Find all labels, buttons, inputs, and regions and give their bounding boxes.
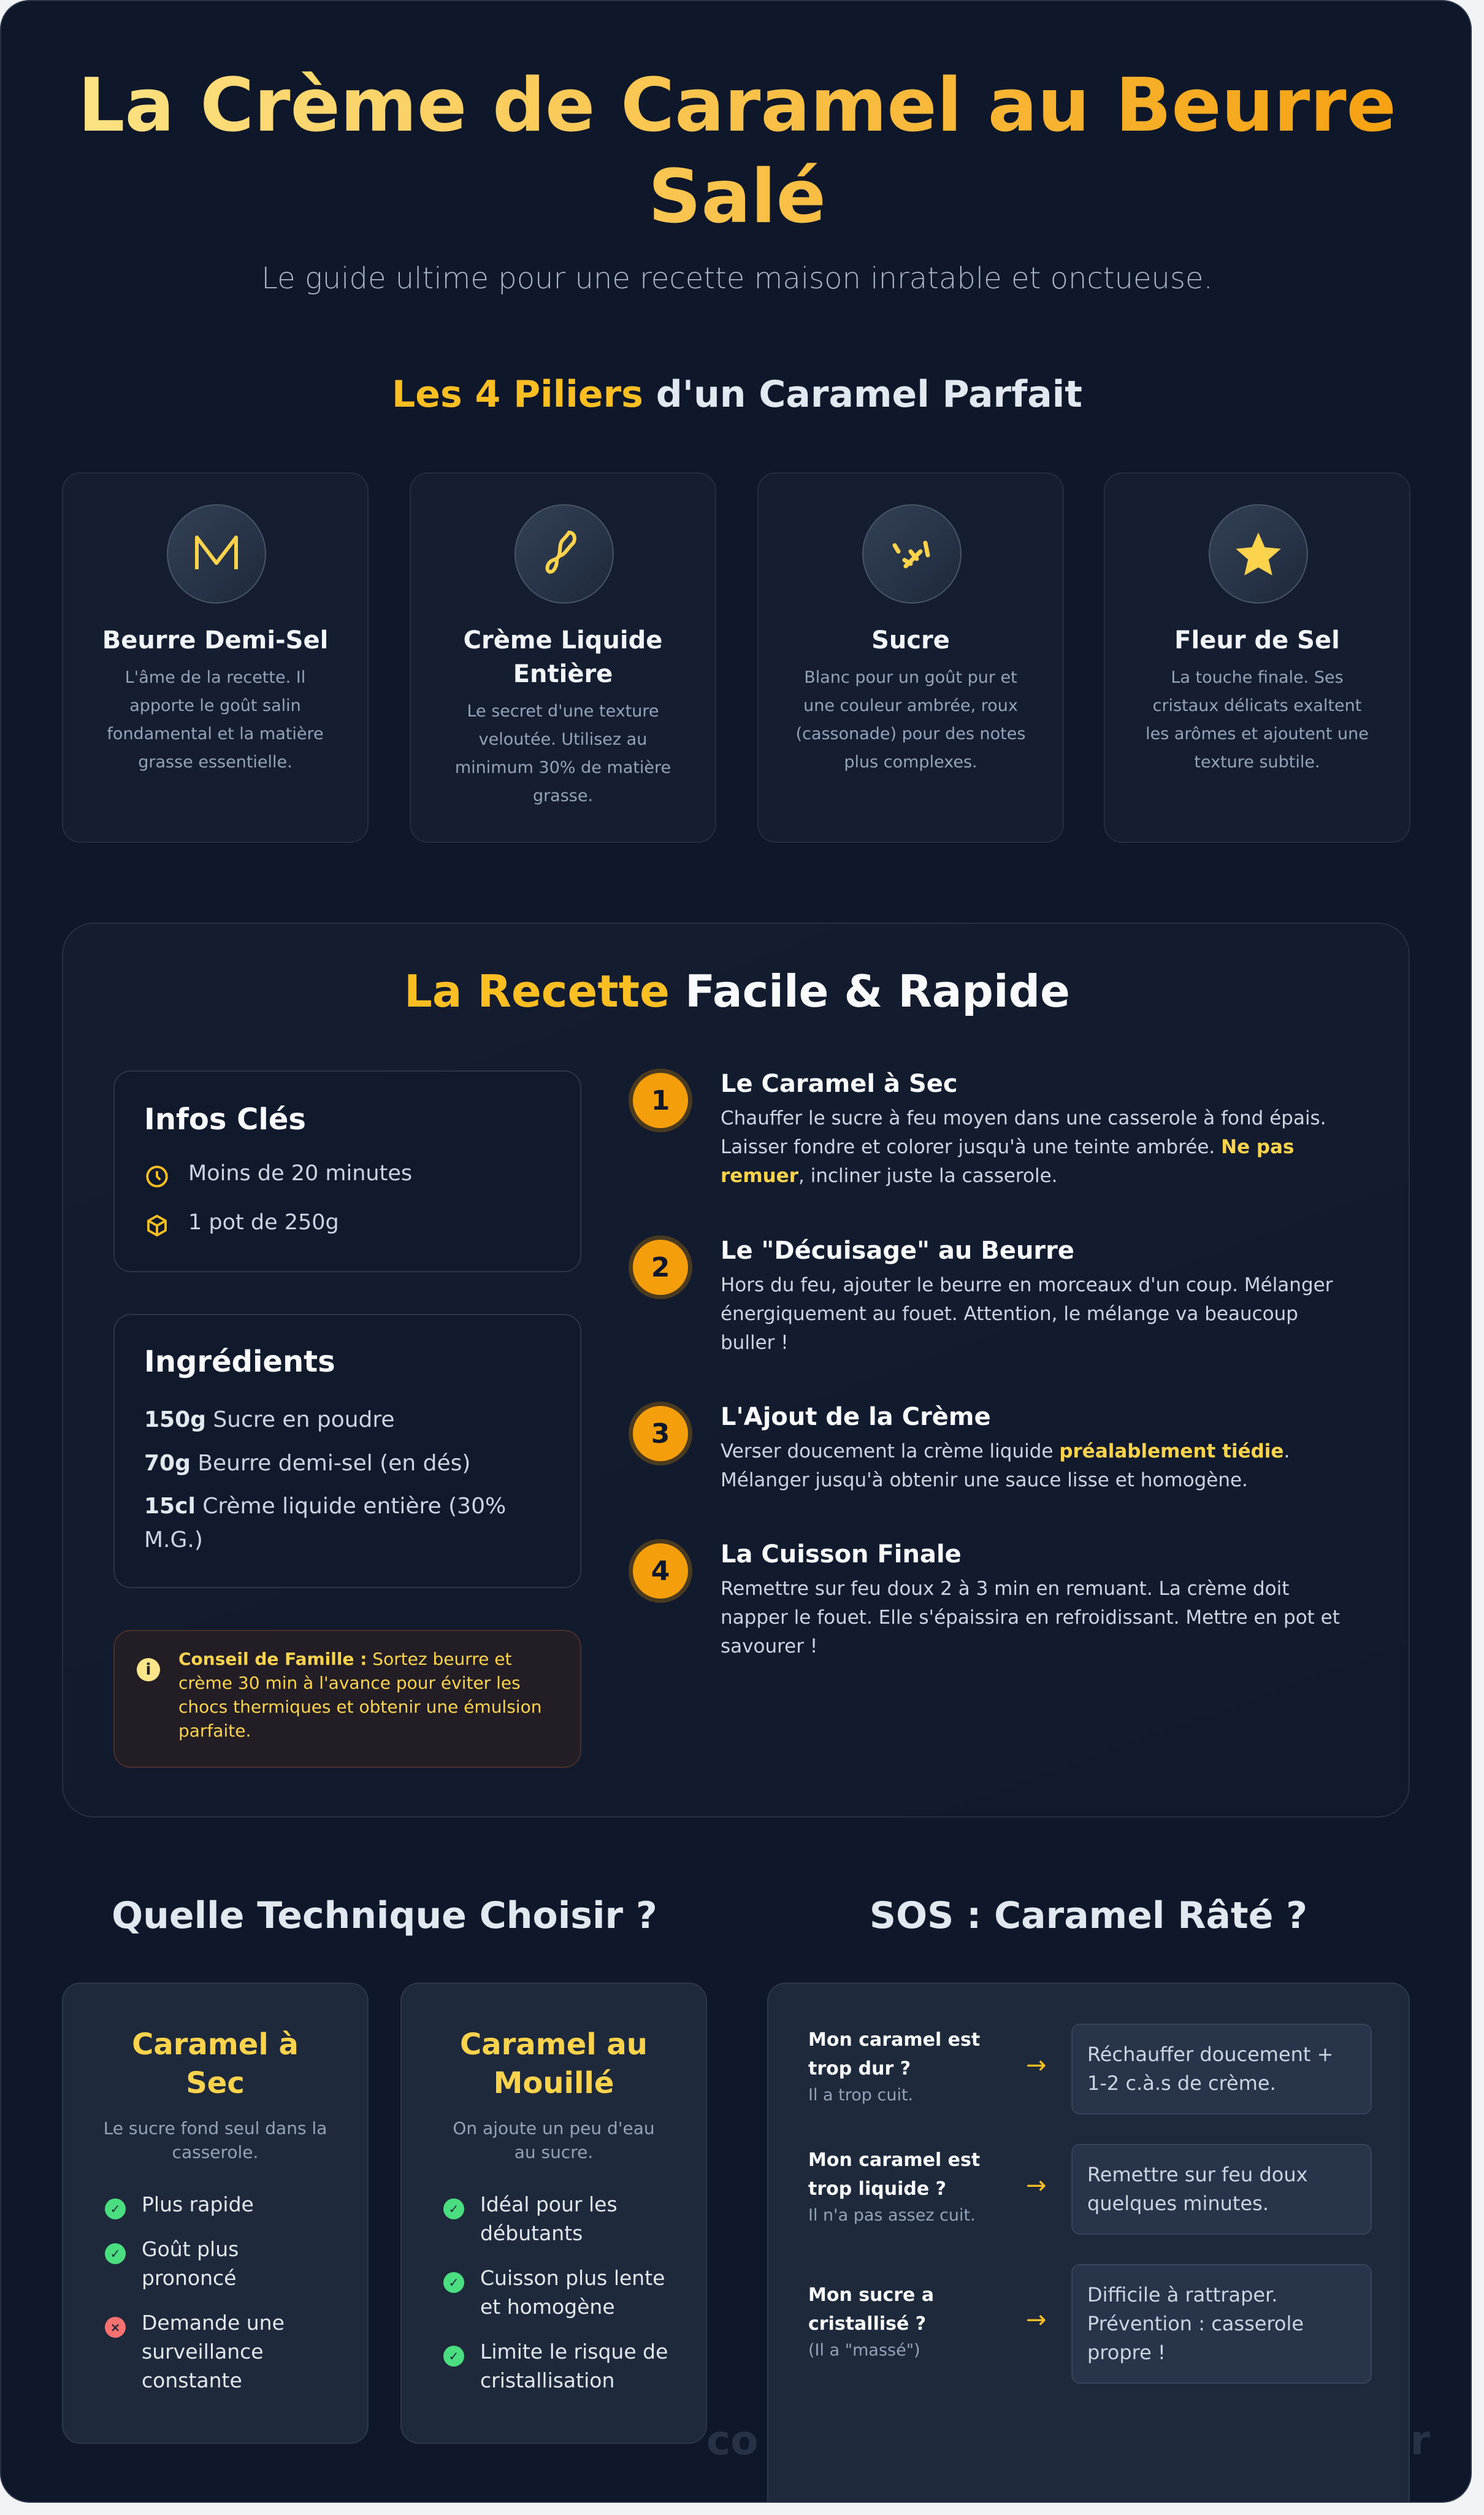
box: ingredients: [113, 1314, 581, 1588]
text: 3: [651, 1418, 670, 1449]
panel: caramel a sec: Demande une surveillance constante: [142, 2311, 285, 2392]
panel: caramel a sec: Caramel à: [132, 2027, 299, 2062]
sos row 3: [808, 2284, 934, 2360]
panel: sos: →: [1026, 2051, 1047, 2079]
title: La Crème de Caramel au Beurre: [78, 63, 1396, 148]
step 1: Chauffer le sucre à feu moyen dans une casserole à fond épais. Laisser fondre et colorer jusqu'à une teinte ambrée. Ne pas remuer, incliner juste la casserole.: [721, 1107, 1326, 1187]
panel: caramel au mouille: ✓: [449, 2275, 459, 2290]
text: 1: [651, 1085, 670, 1116]
panel: fleur de sel: Fleur de Sel: [1174, 626, 1340, 655]
text: 4: [651, 1556, 670, 1586]
box: infos: Moins de 20 minutes: [188, 1161, 412, 1186]
step 3: Verser doucement la crème liquide préalablement tiédie. Mélanger jusqu'à obtenir une sauce lisse et homogène.: [721, 1440, 1290, 1491]
icon: star: [1209, 504, 1308, 604]
step 2: [629, 1235, 1333, 1354]
panel: beurre: Beurre Demi-Sel: [102, 626, 328, 655]
panel: sos: Difficile à rattraper. Prévention : casserole propre !: [1087, 2283, 1304, 2364]
panel: recipe: [62, 923, 1410, 1818]
watermark: r: [1410, 2417, 1430, 2464]
panel: fleur de sel: La touche finale. Ses cristaux délicats exaltent les arômes et ajoutent une texture subtile.: [1146, 668, 1369, 772]
sos row 3: Mon sucre a cristallisé ?: [808, 2284, 934, 2335]
panel: sos: →: [1026, 2171, 1047, 2200]
panel: caramel au mouille: Limite le risque de cristallisation: [480, 2340, 668, 2392]
heading: pillars: Les 4 Piliers d'un Caramel Parfait: [392, 373, 1082, 416]
watermark: co: [706, 2417, 758, 2464]
box: infos: 1 pot de 250g: [188, 1210, 339, 1235]
panel: sos: Remettre sur feu doux quelques minutes.: [1087, 2163, 1308, 2215]
panel: caramel a sec: Sec: [186, 2066, 245, 2100]
panel: beurre: [62, 472, 369, 843]
sos row 3: (Il a "massé"): [808, 2341, 920, 2360]
panel: caramel au mouille: Mouillé: [494, 2066, 614, 2100]
panel: caramel au mouille: ✓: [449, 2202, 459, 2216]
heading: sos: SOS : Caramel Râté ?: [870, 1894, 1307, 1937]
sos row 2: Il n'a pas assez cuit.: [808, 2206, 976, 2225]
icon: box: [147, 1215, 167, 1237]
box: infos: [113, 1070, 581, 1272]
title: Salé: [648, 155, 826, 240]
step 2: Hors du feu, ajouter le beurre en morceaux d'un coup. Mélanger énergiquement au fouet. Attention, le mélange va beaucoup buller !: [721, 1274, 1333, 1354]
step 3: [629, 1402, 1290, 1491]
step 1: [629, 1069, 1326, 1187]
panel: creme: [410, 472, 716, 843]
panel: sucre: Sucre: [871, 626, 950, 655]
sos row 2: [808, 2149, 980, 2225]
sos row 1: Il a trop cuit.: [808, 2086, 913, 2105]
panel: caramel a sec: Le sucre fond seul dans la casserole.: [104, 2118, 327, 2162]
box: ingredients: Ingrédients: [144, 1345, 335, 1379]
text: 2: [651, 1251, 670, 1283]
panel: caramel a sec: [62, 1983, 369, 2444]
box: ingredients: 70g Beurre demi-sel (en dés): [144, 1451, 470, 1476]
title: [1, 60, 1473, 243]
panel: caramel au mouille: Caramel au: [460, 2027, 648, 2062]
icon: info: i: [146, 1661, 151, 1679]
sos row 1: Mon caramel est trop dur ?: [808, 2029, 980, 2079]
panel: creme: Entière: [513, 660, 613, 688]
icon: sugar: [862, 504, 962, 604]
panel: creme: Le secret d'une texture veloutée. Utilisez au minimum 30% de matière grasse.: [455, 702, 671, 805]
icon: cream: [514, 504, 614, 604]
panel: caramel a sec: ✓: [110, 2202, 120, 2216]
panel: sucre: Blanc pour un goût pur et une couleur ambrée, roux (cassonade) pour des notes plus complexes.: [796, 668, 1025, 772]
step 3: L'Ajout de la Crème: [721, 1403, 991, 1431]
panel: caramel au mouille: On ajoute un peu d'eau au sucre.: [453, 2118, 655, 2162]
icon: clock: [146, 1165, 168, 1188]
step 4: Remettre sur feu doux 2 à 3 min en remuant. La crème doit napper le fouet. Elle s'épaissira en refroidissant. Mettre en pot et savourer !: [721, 1578, 1340, 1657]
heading: recipe: La Recette Facile & Rapide: [404, 966, 1070, 1017]
sos row 1: [808, 2029, 980, 2105]
panel: fleur de sel: [1104, 472, 1410, 843]
panel: creme: Crème Liquide: [464, 626, 662, 655]
panel: caramel au mouille: ✓: [449, 2349, 459, 2363]
panel: sucre: [757, 472, 1064, 843]
watermark: [706, 2417, 1430, 2464]
panel: caramel au mouille: [400, 1983, 707, 2444]
panel: sos: Réchauffer doucement + 1-2 c.à.s de crème.: [1087, 2043, 1333, 2095]
panel: caramel a sec: ✓: [110, 2246, 120, 2261]
callout: conseil: [113, 1630, 581, 1768]
subtitle: Le guide ultime pour une recette maison inratable et onctueuse.: [261, 261, 1213, 296]
panel: caramel au mouille: Cuisson plus lente et homogène: [480, 2266, 665, 2319]
callout: conseil: Conseil de Famille : Sortez beurre et crème 30 min à l'avance pour éviter les chocs thermiques et obtenir une émulsion parfaite.: [178, 1649, 541, 1741]
panel: caramel a sec: ×: [110, 2320, 120, 2335]
panel: caramel au mouille: Idéal pour les débutants: [480, 2192, 618, 2245]
panel: caramel a sec: Goût plus prononcé: [142, 2237, 239, 2290]
box: ingredients: 15cl Crème liquide entière (30% M.G.): [144, 1494, 506, 1553]
step 1: Le Caramel à Sec: [721, 1070, 958, 1098]
panel: beurre: L'âme de la recette. Il apporte le goût salin fondamental et la matière grasse essentielle.: [107, 668, 324, 772]
box: ingredients: 150g Sucre en poudre: [144, 1407, 395, 1432]
step 4: La Cuisson Finale: [721, 1540, 962, 1569]
icon: butter: [167, 504, 266, 604]
panel: caramel a sec: Plus rapide: [142, 2192, 254, 2216]
step 4: [629, 1539, 1340, 1657]
box: infos: Infos Clés: [144, 1102, 306, 1137]
step 2: Le "Décuisage" au Beurre: [721, 1237, 1074, 1265]
sos row 2: Mon caramel est trop liquide ?: [808, 2149, 980, 2200]
icon: info: [137, 1658, 160, 1681]
panel: sos: →: [1026, 2306, 1047, 2334]
heading: technique: Quelle Technique Choisir ?: [112, 1894, 657, 1937]
panel: sos: [767, 1983, 1410, 2515]
